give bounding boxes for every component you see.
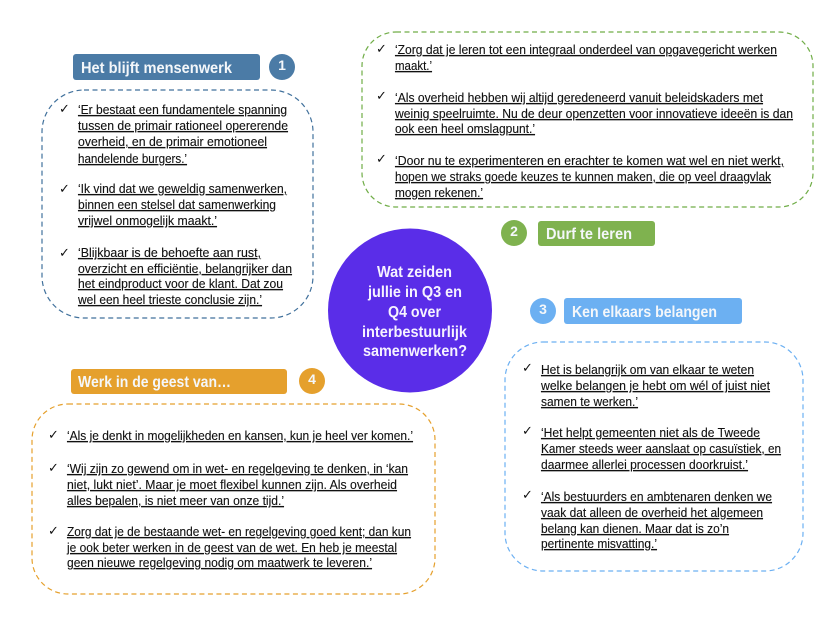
panel 1: quotes mensenwerk: ✓ bbox=[59, 246, 70, 261]
panel 3: quotes belangen bbox=[505, 342, 803, 571]
panel 1: quotes mensenwerk: ✓ bbox=[59, 182, 70, 197]
number badge 1 bbox=[269, 54, 295, 80]
number badge 4: 4 bbox=[308, 371, 316, 387]
central circle: question: interbestuurlijk bbox=[362, 324, 467, 341]
central circle: question: Q4 over bbox=[388, 304, 441, 321]
panel 4: quotes geest van de wet: Zorg dat je de bestaande wet- en regelgeving goed kent; dan kun bbox=[67, 524, 411, 539]
central circle: question: jullie in Q3 en bbox=[367, 284, 462, 301]
panel 1: quotes mensenwerk: ✓ bbox=[59, 102, 70, 117]
panel 1: quotes mensenwerk: ‘Blijkbaar is de behoefte aan rust, bbox=[78, 245, 261, 260]
heading 2: Durf te leren: Durf te leren bbox=[546, 226, 632, 243]
heading 4: Werk in de geest van: Werk in de geest van… bbox=[78, 374, 231, 391]
heading 3: Ken elkaars belangen bbox=[564, 298, 742, 324]
panel 2: quotes leren: ✓ bbox=[376, 42, 387, 57]
panel 1: quotes mensenwerk: ‘Er bestaat een fundamentele spanning bbox=[78, 102, 287, 117]
heading 2: Durf te leren bbox=[538, 221, 655, 246]
panel 3: quotes belangen: ✓ bbox=[522, 361, 533, 376]
panel 4: quotes geest van de wet: geen nieuwe regelgeving nodig om maatwerk te leveren.’ bbox=[67, 555, 372, 570]
panel 3: quotes belangen: welke belangen je hebt om wél of juist niet bbox=[540, 378, 770, 393]
panel 2: quotes leren: maakt.’ bbox=[395, 58, 432, 73]
panel 3: quotes belangen: ✓ bbox=[522, 424, 533, 439]
central circle: question: Wat zeiden bbox=[377, 264, 452, 281]
panel 1: quotes mensenwerk: ‘Ik vind dat we geweldig samenwerken, bbox=[78, 181, 287, 196]
panel 4: quotes geest van de wet: niet, lukt niet’. Maar je moet flexibel kunnen zijn. Als overheid bbox=[67, 477, 397, 492]
panel 4: quotes geest van de wet: je ook beter werken in de geest van de wet. En heb je meestal bbox=[66, 540, 397, 555]
panel 4: quotes geest van de wet bbox=[32, 404, 435, 594]
panel 2: quotes leren: ✓ bbox=[376, 152, 387, 167]
panel 1: quotes mensenwerk bbox=[42, 90, 313, 318]
panel 4: quotes geest van de wet: ‘Als je denkt in mogelijkheden en kansen, kun je heel ver komen.’ bbox=[67, 428, 413, 443]
heading 4: Werk in de geest van bbox=[71, 369, 287, 394]
panel 1: quotes mensenwerk: overzicht en efficiëntie, belangrijker dan bbox=[78, 261, 292, 276]
heading 1: Het blijft mensenwerk: Het blijft mensenwerk bbox=[81, 60, 232, 77]
panel 4: quotes geest van de wet: alles bepalen, is niet meer van onze tijd.’ bbox=[67, 493, 284, 508]
panel 2: quotes leren: ‘Als overheid hebben wij altijd geredeneerd vanuit beleidskaders met bbox=[395, 90, 763, 105]
number badge 2 bbox=[501, 220, 527, 246]
number badge 2: 2 bbox=[510, 223, 518, 239]
number badge 3 bbox=[530, 298, 556, 324]
panel 4: quotes geest van de wet: ‘Wij zijn zo gewend om in wet- en regelgeving te denken, in ‘kan bbox=[67, 461, 408, 476]
panel 2: quotes leren: ‘Zorg dat je leren tot een integraal onderdeel van opgavegericht werken bbox=[395, 42, 777, 57]
panel 2: quotes leren bbox=[362, 32, 813, 207]
panel 2: quotes leren: ✓ bbox=[376, 89, 387, 104]
panel 3: quotes belangen: vaak dat alleen de overheid het algemeen bbox=[541, 505, 763, 520]
central circle: question: samenwerken? bbox=[363, 343, 467, 360]
panel 3: quotes belangen: belang kan dienen. Maar dat is zo’n bbox=[541, 521, 729, 536]
panel 2: quotes leren: ook een heel omslagpunt.’ bbox=[395, 121, 535, 136]
panel 4: quotes geest van de wet: ✓ bbox=[48, 524, 59, 539]
panel 1: quotes mensenwerk: vrijwel onmogelijk maakt.’ bbox=[78, 213, 217, 228]
panel 1: quotes mensenwerk: handelende burgers.’ bbox=[78, 151, 187, 166]
panel 3: quotes belangen: Kamer steeds weer aanslaat op casuïstiek, en bbox=[541, 441, 781, 456]
panel 1: quotes mensenwerk: wel een heel trieste conclusie zijn.’ bbox=[77, 292, 262, 307]
panel 2: quotes leren: hopen we straks goede keuzes te kunnen maken, die op veel draagvlak bbox=[395, 169, 772, 184]
panel 1: quotes mensenwerk: het eindproduct voor de klant. Dat zou bbox=[78, 276, 283, 291]
panel 4: quotes geest van de wet: ✓ bbox=[48, 461, 59, 476]
panel 1: quotes mensenwerk: tussen de primair rationeel opererende bbox=[78, 118, 288, 133]
heading 1: Het blijft mensenwerk bbox=[73, 54, 260, 80]
number badge 4 bbox=[299, 368, 325, 394]
panel 3: quotes belangen: ‘Als bestuurders en ambtenaren denken we bbox=[541, 489, 772, 504]
panel 3: quotes belangen: Het is belangrijk om van elkaar te weten bbox=[541, 362, 754, 377]
panel 3: quotes belangen: samen te werken.’ bbox=[541, 394, 638, 409]
panel 3: quotes belangen: ‘Het helpt gemeenten niet als de Tweede bbox=[541, 425, 760, 440]
panel 2: quotes leren: weinig speelruimte. Nu de deur openzetten voor innovatieve ideeën is dan bbox=[394, 106, 793, 121]
panel 3: quotes belangen: daarmee allerlei processen doorkruist.’ bbox=[541, 457, 748, 472]
panel 3: quotes belangen: pertinente misvatting.’ bbox=[541, 536, 657, 551]
panel 2: quotes leren: mogen rekenen.’ bbox=[395, 185, 483, 200]
panel 1: quotes mensenwerk: binnen een stelsel dat samenwerking bbox=[78, 197, 276, 212]
panel 4: quotes geest van de wet: ✓ bbox=[48, 428, 59, 443]
number badge 1: 1 bbox=[278, 57, 286, 73]
panel 2: quotes leren: ‘Door nu te experimenteren en erachter te komen wat wel en niet werkt, bbox=[395, 153, 784, 168]
number badge 3: 3 bbox=[539, 301, 547, 317]
panel 1: quotes mensenwerk: overheid, en de primair emotioneel bbox=[78, 134, 267, 149]
central circle: question bbox=[328, 228, 492, 392]
panel 3: quotes belangen: ✓ bbox=[522, 488, 533, 503]
heading 3: Ken elkaars belangen: Ken elkaars belangen bbox=[572, 304, 717, 321]
